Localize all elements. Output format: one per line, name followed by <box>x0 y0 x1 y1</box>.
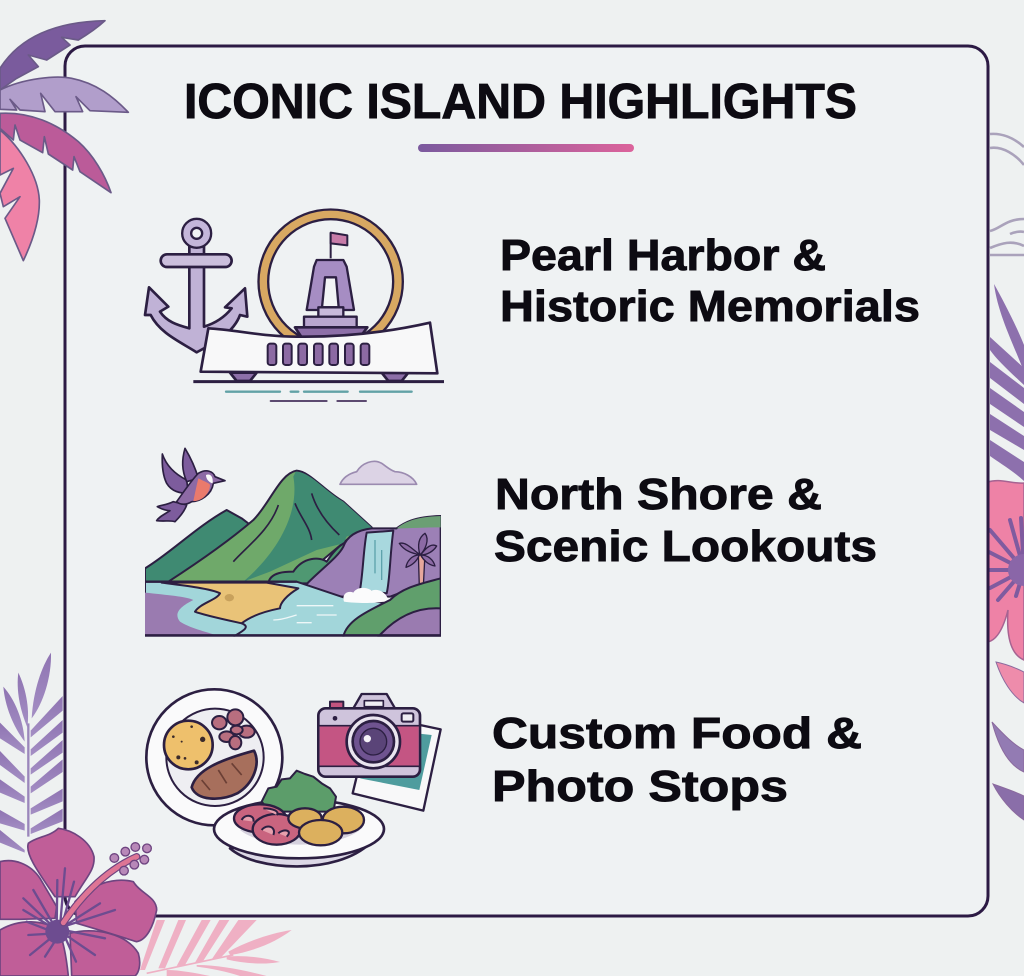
decoration: right swirl lines <box>990 134 1024 255</box>
decoration: bottom-left purple frond <box>0 653 63 853</box>
title: ICONIC ISLAND HIGHLIGHTS <box>184 75 857 129</box>
title underline <box>418 144 634 152</box>
hibiscus pistil <box>63 857 137 923</box>
platform feet <box>230 373 257 381</box>
decoration: right small leaves <box>992 662 1024 820</box>
decoration: bottom pink frond <box>140 920 292 976</box>
photo print <box>353 725 441 811</box>
memorial platform <box>201 323 437 373</box>
label: Custom Food <box>492 709 862 811</box>
label: Pearl Harbor <box>500 231 920 331</box>
waterfall foam <box>343 588 388 603</box>
label: Custom Food: Custom Food & <box>492 709 862 758</box>
label: Custom Food: Photo Stops <box>492 762 788 811</box>
label: Pearl Harbor: Pearl Harbor & <box>500 231 826 280</box>
hibiscus stamens <box>23 868 115 962</box>
icon: anchor and memorial <box>145 214 444 401</box>
lake <box>145 582 388 637</box>
round plate <box>146 689 282 825</box>
icon: food plates and camera <box>146 689 441 866</box>
label: North Shore <box>494 470 877 571</box>
palm tree <box>399 533 437 587</box>
waterline <box>193 377 444 386</box>
landscape <box>145 471 441 637</box>
anchor <box>145 223 247 352</box>
label: Pearl Harbor: Historic Memorials <box>500 282 920 331</box>
right bank <box>343 578 441 637</box>
label: North Shore: Scenic Lookouts <box>494 522 877 571</box>
oval plate <box>214 771 384 866</box>
platform windows <box>268 344 369 365</box>
decoration: right pink hibiscus <box>988 481 1024 660</box>
decoration: right purple frond <box>990 284 1024 481</box>
camera <box>318 694 420 777</box>
bird <box>157 448 225 522</box>
memorial tower <box>295 233 367 337</box>
cloud <box>340 461 417 484</box>
decoration: bottom-left hibiscus flower <box>0 828 157 976</box>
decoration: top-left palm leaves <box>0 21 128 261</box>
label: North Shore: North Shore & <box>495 470 822 519</box>
icon: bird, mountain and waterfall <box>145 448 441 637</box>
gold ring <box>263 214 398 349</box>
